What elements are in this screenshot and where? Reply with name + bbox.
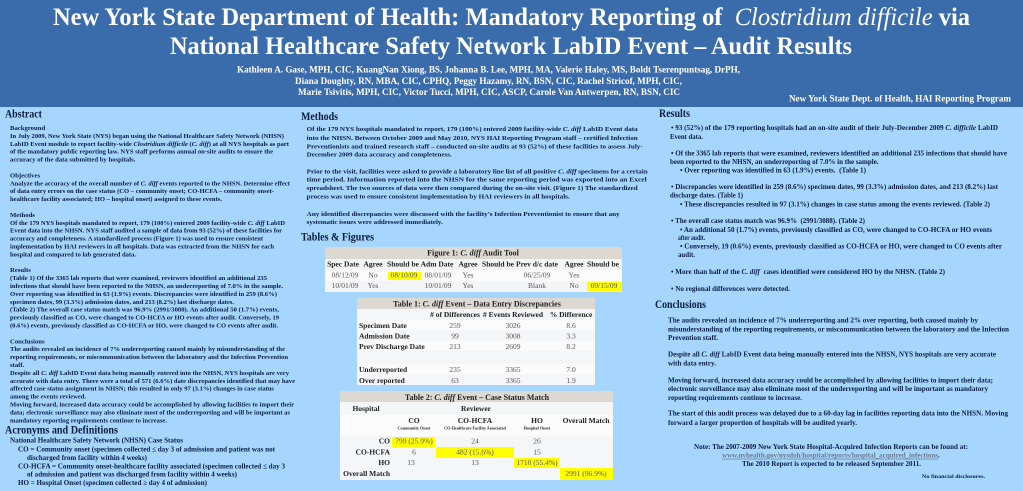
text block: abstract results: Results xyxy=(10,267,31,274)
text block: abstract conclusions: Conclusions xyxy=(10,338,45,345)
text block: conclusions body: The start of this audit process was delayed due to a 60-day lag in facilities reporting data into the NHSN. Moving xyxy=(668,410,1008,418)
heading: results: Results xyxy=(659,108,690,120)
table 2: case status match: Table 2: C. diff Event – Case Status Match xyxy=(405,393,550,402)
panel: methods xyxy=(301,111,648,226)
bullet list: results: been reported to the NHSN, an underreporting of 7.0% in the sample. xyxy=(670,158,879,166)
table 2: case status match: 1710 (55.4%) xyxy=(516,458,558,467)
text block: abstract conclusions: accurate with data entry. There were a total of 571 (6.6%) date discrepancies identified that may have xyxy=(10,378,295,385)
figure 1: audit tool table: Yes xyxy=(463,270,474,280)
figure 1: audit tool table: Yes xyxy=(463,281,474,290)
table 1: data entry discrepancies: Over reported xyxy=(359,376,406,385)
table 1: data entry discrepancies: 3365 xyxy=(506,376,521,385)
authors: Marie Tsivitis, MPH, CIC, Victor Tucci, MPH, CIC, ASCP, Carole Van Antwerpen, RN, BSN, CIC xyxy=(298,87,680,98)
figure 1: audit tool table: 10/01/09 xyxy=(425,281,452,290)
note: report link: Note: The 2007-2009 New York State Hospital-Acquired Infection Reports can be found at: xyxy=(694,443,968,451)
table 2: case status match: HO xyxy=(531,416,543,425)
text block: abstract methods: Event data into the NHSN. NYS staff audited a sample of data from 93 (52%) of these facilities for xyxy=(10,228,282,235)
figure 1: audit tool table: Agree xyxy=(363,260,383,269)
text block: abstract results xyxy=(10,267,283,330)
text block: conclusions body: electronic surveillance may also eliminate most of the underreporting and will be important as mandatory xyxy=(668,385,988,393)
title: New York State Department of Health: Mandatory Reporting of Clostridium difficile via xyxy=(53,4,970,31)
text block: abstract results: (Table 2) The overall case status match was 96.9% (2991/3088). An additional 50 (1.7%) events, xyxy=(10,307,279,314)
bullet list: results: audit. xyxy=(678,251,695,259)
text block: abstract conclusions: mandatory reporting requirements continue to increase. xyxy=(10,417,167,424)
table 2: case status match: 24 xyxy=(471,436,479,446)
bullet list: results: • These discrepancies resulted in 97 (3.1%) changes in case status among the events reviewed. (Table 2) xyxy=(680,201,991,209)
text block: methods body: Prior to the visit, facilities were asked to provide a laboratory line list of all positive C. diff specimens for a certain xyxy=(307,168,648,175)
table 1: data entry discrepancies: Specimen Date xyxy=(359,321,407,330)
figure 1: audit tool table: 09/15/09 xyxy=(591,281,618,290)
figure 1: audit tool table: Prev d/c date xyxy=(516,260,559,269)
text block: conclusions body: Moving forward, increased data accuracy could be accomplished by allowing facilities to import their data; xyxy=(668,376,993,384)
table 2: case status match: 13 xyxy=(407,458,415,467)
text block: methods body: process was used to ensure consistent implementation by HAI reviewers in all hospitals. xyxy=(307,194,570,201)
text block: abstract background: of the mandatory public reporting law. NYS staff performs annual on-site audits to ensure the xyxy=(10,149,273,156)
text block: methods body: December 2009 data accuracy and completeness. xyxy=(307,152,452,159)
table 2: case status match: 15 xyxy=(533,448,541,456)
figure 1: audit tool table xyxy=(325,247,622,292)
text block: abstract background: accuracy of the data submitted by hospitals. xyxy=(10,157,136,164)
heading: abstract: Abstract xyxy=(5,109,42,121)
authors: Kathleen A. Gase, MPH, CIC, KuangNan Xiong, BS, Johanna B. Lee, MPH, MA, Valerie Haley, MS, Boldt Tserenpuntsag, DrPH, xyxy=(237,64,741,76)
table 1: data entry discrepancies: # of Differences xyxy=(430,310,480,319)
text block: abstract background: Background xyxy=(10,125,45,132)
table 2: case status match: CO-HCFA xyxy=(356,448,391,456)
table 1: data entry discrepancies: Admission Date xyxy=(359,332,410,340)
table 1: data entry discrepancies: Underreported xyxy=(359,365,408,374)
figure 1: audit tool table: Yes xyxy=(368,281,379,290)
text block: conclusions body: forward a larger proportion of hospitals will be audited yearly. xyxy=(668,419,857,427)
table 1: data entry discrepancies: % Difference xyxy=(550,310,593,319)
text block: abstract conclusions: Moving forward, increased data accuracy could be accomplished by allowing facilities to import their xyxy=(10,402,294,408)
table 1: data entry discrepancies: 3026 xyxy=(506,321,521,330)
text block: abstract conclusions: data; electronic surveillance may also eliminate most of the underreporting and will be important as xyxy=(10,409,290,416)
table 1: data entry discrepancies: 3.3 xyxy=(566,332,576,340)
table 2: case status match xyxy=(340,391,613,480)
text block: abstract methods: Methods xyxy=(10,212,35,219)
bullet list: results: • No regional differences were detected. xyxy=(671,285,790,293)
panel: conclusions xyxy=(655,299,1009,427)
title: National Healthcare Safety Network LabID Event – Audit Results xyxy=(170,33,852,60)
bullet list: results: • 93 (52%) of the 179 reporting hospitals had an on-site audit of their July-December 2009 C. difficile LabID xyxy=(671,124,998,132)
text block: methods body: Preventionists and trained research staff – conducted on-site audits at 93 (52%) of these facilities to assess July- xyxy=(307,143,643,150)
table 1: data entry discrepancies: 3008 xyxy=(506,332,521,340)
text block: abstract conclusions: Despite all C. diff LabID Event data being manually entered into the NHSN, NYS hospitals are very xyxy=(10,370,290,377)
figure 1: audit tool table: 08/12/09 xyxy=(332,270,359,280)
heading: acronyms: Acronyms and Definitions xyxy=(5,424,118,436)
bullet list: results: • Over reporting was identified in 63 (1.9%) events. (Table 1) xyxy=(680,167,867,175)
text block: abstract background: LabID Event module to report facility-wide Clostridium difficile (C. diff) at all NYS hospitals as part xyxy=(10,141,290,148)
figure 1: audit tool table: 10/01/09 xyxy=(332,281,359,290)
note: report link: www.nyhealth.gov/nysdoh/hospital/reports/hospital_acquired_infections xyxy=(722,452,938,460)
figure 1: audit tool table: Adm Date xyxy=(421,260,454,269)
bullet list: results: • An additional 50 (1.7%) events, previously classified as CO, were changed to CO-HCFA or HO events xyxy=(680,226,992,234)
text block: methods body: Any identified discrepancies were discussed with the facility’s Infection Preventionist to ensure that any xyxy=(307,211,620,218)
text block: methods body: spreadsheet. The two sources of data were then compared during the on-site visit. (Figure 1) The standardized xyxy=(307,185,638,192)
figure 1: audit tool table: Figure 1: C. diff Audit Tool xyxy=(427,248,520,258)
figure 1: audit tool table: Spec Date xyxy=(327,260,360,269)
table 2: case status match: 799 (25.9%) xyxy=(395,436,433,446)
table 1: data entry discrepancies: 259 xyxy=(449,321,461,330)
text block: abstract conclusions: reporting requirements, or miscommunication between the laboratory and the Infection Prevention xyxy=(10,354,288,361)
text block: conclusions body: with data entry. xyxy=(668,360,716,368)
figure 1: audit tool table: Should be xyxy=(387,260,420,269)
table 2: case status match: Community Onset xyxy=(398,426,431,430)
text block: conclusions body: Despite all C. diff LabID Event data being manually entered into the NHSN, NYS hospitals are very accurate xyxy=(668,351,996,359)
heading: methods: Methods xyxy=(301,111,338,123)
text block: abstract methods: hospital and compared to lab generated data. xyxy=(10,251,136,258)
text block: methods body: systematic issues were addressed immediately. xyxy=(307,219,443,226)
table 2: case status match: CO xyxy=(379,436,390,446)
text block: abstract methods: implementation by HAI reviewers in all hospitals. Data was extracted from the NHSN for each xyxy=(10,244,274,250)
table 1: data entry discrepancies: 63 xyxy=(451,376,459,385)
bullet list: results: Event data. xyxy=(670,133,703,141)
note: disclosures: No financial disclosures. xyxy=(922,474,986,480)
figure 1: audit tool table: Should be xyxy=(587,260,620,269)
bullet list: results: after audit. xyxy=(678,234,705,242)
text block: methods body: time period. Information reported into the NHSN for the same reporting period was exported into an Excel xyxy=(307,177,647,184)
table 2: case status match: Reviewer xyxy=(461,404,492,413)
figure 1: audit tool table: Agree xyxy=(458,260,478,269)
text block: definitions: CO = Community onset (specimen collected ≤ day 3 of admission and patient was not xyxy=(18,445,276,454)
text block: abstract results: previously classified as CO, were changed to CO-HCFA or HO events after audit. Conversely, 19 xyxy=(10,315,280,322)
table 1: data entry discrepancies: 1.9 xyxy=(566,376,576,385)
panel: results xyxy=(659,108,1007,293)
text block: abstract objectives: Analyze the accuracy of the overall number of C. diff events reported to the NHSN. Determine effect xyxy=(10,180,291,187)
text block: abstract results: Over reporting was identified in 63 (1.9%) events. Discrepancies were identified in 259 (8.6%) xyxy=(10,291,277,298)
bullet list: results: • Conversely, 19 (0.6%) events, previously classified as CO-HCFA or HO, were changed to CO events after xyxy=(680,242,1002,250)
heading: tables and figures: Tables & Figures xyxy=(301,232,374,244)
bullet list: results: • Of the 3365 lab reports that were examined, reviewers identified an additional 235 infections that should have xyxy=(671,150,1007,158)
figure 1: audit tool table: Should be xyxy=(482,260,515,269)
text block: abstract objectives: of data entry errors on the case status (CO – community onset; CO-HCFA – community onset- xyxy=(10,188,274,195)
bullet list: results: • The overall case status match was 96.9% (2991/3088). (Table 2) xyxy=(671,217,866,225)
table 2: case status match: 6 xyxy=(412,448,416,456)
table 1: data entry discrepancies: 7.0 xyxy=(566,365,576,374)
text block: methods body: into the NHSN. Between October 2009 and May 2010, NYS HAI Reporting Program staff – certified Infection xyxy=(307,135,638,142)
text block: definitions xyxy=(10,435,285,487)
text block: abstract methods: Of the 179 NYS hospitals mandated to report, 179 (100%) entered 2009 facility-wide C. diff LabID xyxy=(10,220,285,227)
text block: methods body: Of the 179 NYS hospitals mandated to report, 179 (100%) entered 2009 facility-wide C. diff LabID Event data xyxy=(307,126,638,133)
text block: definitions: of admission and patient was discharged from facility within 4 weeks) xyxy=(27,470,238,479)
authors: Diana Doughty, RN, MBA, CIC, CPHQ, Peggy Hazamy, RN, BSN, CIC, Rachel Stricof, MPH, CIC, xyxy=(295,76,683,87)
table 2: case status match: Hospital xyxy=(352,404,380,413)
text block: abstract conclusions xyxy=(10,338,295,424)
note: report link xyxy=(694,443,968,468)
panel: acronyms and definitions xyxy=(5,424,285,487)
text block: abstract background xyxy=(10,125,290,164)
figure 1: audit tool table: Yes xyxy=(569,270,580,280)
text block: conclusions body xyxy=(668,317,1009,427)
table 2: case status match: CO xyxy=(408,416,420,425)
figure 1: audit tool table: No xyxy=(569,281,579,290)
text block: definitions: HO = Hospital Onset (specimen collected ≥ day 4 of admission) xyxy=(18,478,208,487)
table 2: case status match: Hospital Onset xyxy=(524,426,551,430)
text block: abstract objectives xyxy=(10,172,291,203)
figure 1: audit tool table: 08/01/09 xyxy=(425,270,452,280)
affiliation: New York State Dept. of Health, HAI Reporting Program xyxy=(789,94,1012,104)
bullet list: results xyxy=(670,124,1007,293)
text block: definitions: National Healthcare Safety Network (NHSN) Case Status xyxy=(10,435,183,444)
table 2: case status match: Overall Match xyxy=(343,469,391,478)
table 2: case status match: Overall Match xyxy=(563,416,610,425)
table 1: data entry discrepancies: # Events Reviewed xyxy=(483,310,544,319)
header banner xyxy=(0,0,1023,107)
figure 1: audit tool table: Blank xyxy=(528,281,546,290)
text block: conclusions body: The audits revealed an incidence of 7% underreporting and 2% over reporting, both caused mainly by xyxy=(668,317,978,325)
text block: abstract methods: accuracy and completeness. A standardized process (Figure 1) was used to ensure consistent xyxy=(10,236,264,243)
note: report link: . xyxy=(938,452,940,460)
table 1: data entry discrepancies: Prev Discharge Date xyxy=(359,342,425,351)
text block: conclusions body: Prevention staff. xyxy=(668,334,718,342)
table 1: data entry discrepancies: Table 1: C. diff Event – Data Entry Discrepancies xyxy=(393,300,561,308)
text block: conclusions body: misunderstanding of the reporting requirements, or miscommunication between the laboratory and the Infection xyxy=(668,326,1009,334)
table 2: case status match: CO-Healthcare Facility Associated xyxy=(444,426,507,430)
text block: abstract methods xyxy=(10,212,285,258)
note: report link: The 2010 Report is expected to be released September 2011. xyxy=(742,460,921,468)
bullet list: results: • More than half of the C. diff cases identified were considered HO by the NHSN. (Table 2) xyxy=(671,268,946,276)
panel: abstract xyxy=(5,109,295,424)
bullet list: results: • Discrepancies were identified in 259 (8.6%) specimen dates, 99 (3.3%) admission dates, and 213 (8.2%) last xyxy=(671,183,999,191)
table 2: case status match: 482 (15.6%) xyxy=(456,448,494,456)
text block: abstract conclusions: among the events reviewed. xyxy=(10,394,86,401)
heading: conclusions: Conclusions xyxy=(655,299,706,311)
table 1: data entry discrepancies: 235 xyxy=(449,365,461,374)
bullet list: results: discharge dates. (Table 1) xyxy=(670,192,744,200)
text block: definitions: CO-HCFA = Community onset-healthcare facility associated (specimen collected ≤ day 3 xyxy=(18,461,285,470)
text block: abstract conclusions: affected case status assignment in NHSN; this resulted in only 97 (3.1%) changes in case status xyxy=(10,386,274,393)
text block: abstract objectives: Objectives xyxy=(10,172,40,179)
text block: conclusions body: reporting requirements continue to increase. xyxy=(668,394,802,402)
title xyxy=(53,4,970,60)
table 1: data entry discrepancies xyxy=(357,298,595,385)
figure 1: audit tool table: Agree xyxy=(564,260,584,269)
text block: abstract conclusions: The audits revealed an incidence of 7% underreporting caused mainly by misunderstanding of the xyxy=(10,346,285,353)
table 2: case status match: 26 xyxy=(533,436,541,446)
text block: abstract background: In July 2009, New York State (NYS) began using the National Healthcare Safety Network (NHSN) xyxy=(10,133,284,140)
text block: abstract results: (0.6%) events, previously classified as CO-HCFA or HO, were changed to CO events after audit. xyxy=(10,322,278,330)
text block: abstract results: infections that should have been reported to the NHSN, an underreporting of 7.0% in the sample. xyxy=(10,283,283,290)
text block: definitions: discharged from facility within 4 weeks) xyxy=(27,453,147,462)
table 2: case status match: 2991 (96.9%) xyxy=(565,469,607,478)
table 1: data entry discrepancies: 8.6 xyxy=(566,321,576,330)
table 1: data entry discrepancies: 99 xyxy=(451,332,459,340)
table 1: data entry discrepancies: 3365 xyxy=(506,365,521,374)
table 1: data entry discrepancies: 2609 xyxy=(506,342,521,351)
table 2: case status match: 13 xyxy=(471,458,479,467)
text block: methods body xyxy=(307,126,648,226)
table 1: data entry discrepancies: 213 xyxy=(449,342,461,351)
figure 1: audit tool table: 06/25/09 xyxy=(524,270,551,280)
authors xyxy=(237,64,741,98)
table 1: data entry discrepancies: 8.2 xyxy=(566,342,576,351)
text block: abstract results: specimen dates, 99 (3.3%) admission dates, and 213 (8.2%) last discharge dates. xyxy=(10,299,234,306)
text block: abstract objectives: healthcare facility associated; HO – hospital onset) assigned to these events. xyxy=(10,196,222,203)
table 2: case status match: CO-HCFA xyxy=(458,416,493,425)
figure 1: audit tool table: 08/10/09 xyxy=(391,270,418,280)
figure 1: audit tool table: No xyxy=(368,270,378,280)
text block: abstract conclusions: staff. xyxy=(10,362,25,369)
text block: abstract results: (Table 1) Of the 3365 lab reports that were examined, reviewers identified an additional 235 xyxy=(10,275,268,282)
table 2: case status match: HO xyxy=(378,458,390,467)
